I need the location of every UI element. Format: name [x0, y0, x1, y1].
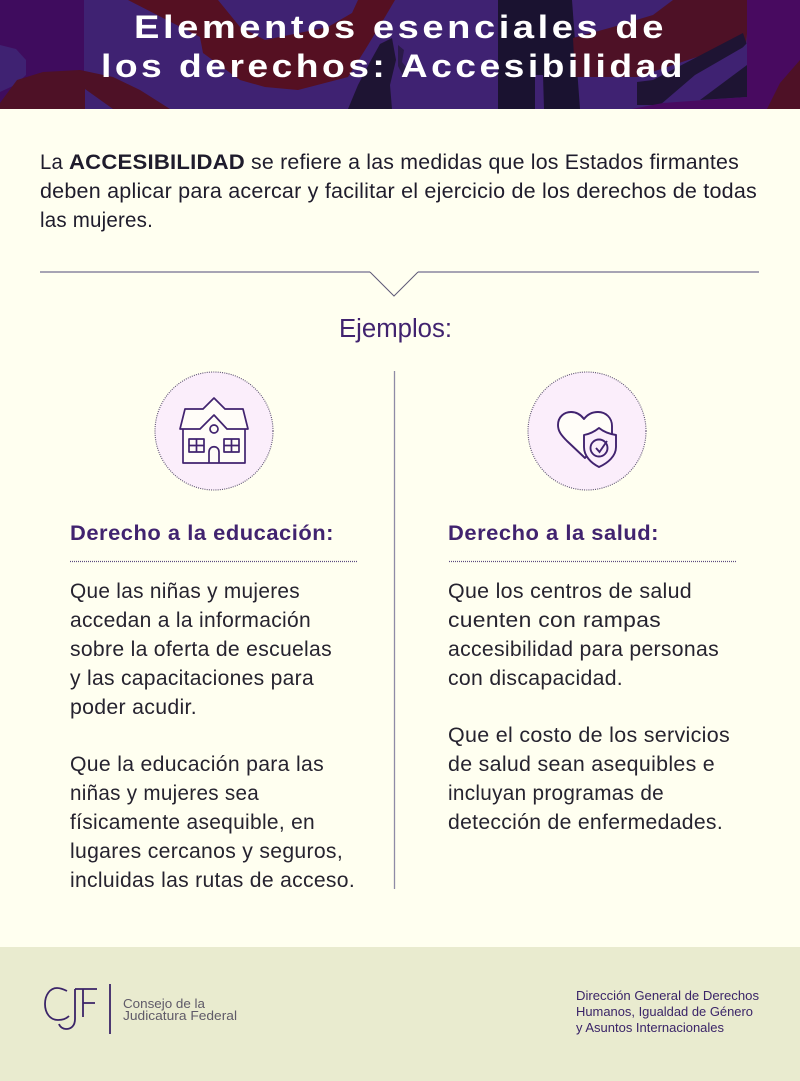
text: salud examples: incluyan programas de: [448, 782, 664, 805]
text: salud examples: Que los centros de salud: [448, 580, 692, 603]
intro paragraph: [40, 151, 757, 232]
text: educación examples: Que la educación para las: [70, 753, 324, 776]
text: educación examples: físicamente asequible, en: [70, 811, 315, 834]
directorate text: [576, 989, 759, 1035]
title: los derechos: Accesibilidad: [101, 48, 686, 84]
text: salud examples: Que el costo de los servicios: [448, 724, 730, 747]
column: Derecho a la educación: [70, 522, 358, 892]
text: educación examples: sobre la oferta de escuelas: [70, 638, 332, 661]
text: salud examples: accesibilidad para personas: [448, 638, 719, 661]
directorate text: Dirección General de Derechos: [576, 989, 759, 1003]
column: Derecho a la salud: [448, 522, 736, 834]
intro paragraph: se refiere a las medidas que los Estados firmantes: [251, 151, 739, 174]
intro paragraph: deben aplicar para acercar y facilitar el ejercicio de los derechos de todas: [40, 180, 757, 203]
text: educación examples: Que las niñas y mujeres: [70, 580, 300, 603]
text: educación examples: niñas y mujeres sea: [70, 782, 259, 805]
column divider: [394, 371, 396, 889]
subheading: salud: Derecho a la salud:: [448, 522, 659, 545]
heading: Ejemplos: Ejemplos:: [339, 315, 452, 343]
subheading: educación: Derecho a la educación:: [70, 522, 334, 545]
text: educación examples: accedan a la información: [70, 609, 311, 632]
intro paragraph: La: [40, 151, 63, 174]
text: educación examples: [70, 580, 355, 892]
text: educación examples: y las capacitaciones para: [70, 667, 314, 690]
title: [101, 9, 686, 84]
text: educación examples: poder acudir.: [70, 696, 197, 719]
text: salud examples: con discapacidad.: [448, 667, 623, 690]
directorate text: Humanos, Igualdad de Género: [576, 1005, 753, 1019]
footer: [0, 947, 800, 1081]
logo name: Consejo de la: [123, 996, 206, 1011]
text: salud examples: cuenten con rampas: [448, 609, 661, 632]
logo: CJF: [45, 984, 110, 1034]
icon: heart with shield: [528, 372, 646, 490]
intro paragraph: ACCESIBILIDAD: [69, 151, 245, 174]
text: educación examples: incluidas las rutas de acceso.: [70, 869, 355, 892]
logo name: Judicatura Federal: [123, 1008, 237, 1023]
intro paragraph: las mujeres.: [40, 209, 153, 232]
header banner: [0, 0, 800, 109]
title: Elementos esenciales de: [134, 9, 667, 45]
divider with downward arrow: [40, 272, 759, 296]
directorate text: y Asuntos Internacionales: [576, 1021, 724, 1035]
text: salud examples: [448, 580, 730, 834]
text: salud examples: detección de enfermedades.: [448, 811, 723, 834]
text: salud examples: de salud sean asequibles e: [448, 753, 715, 776]
logo name: [123, 996, 237, 1023]
icon: school building: [155, 372, 273, 490]
text: educación examples: lugares cercanos y seguros,: [70, 840, 343, 863]
